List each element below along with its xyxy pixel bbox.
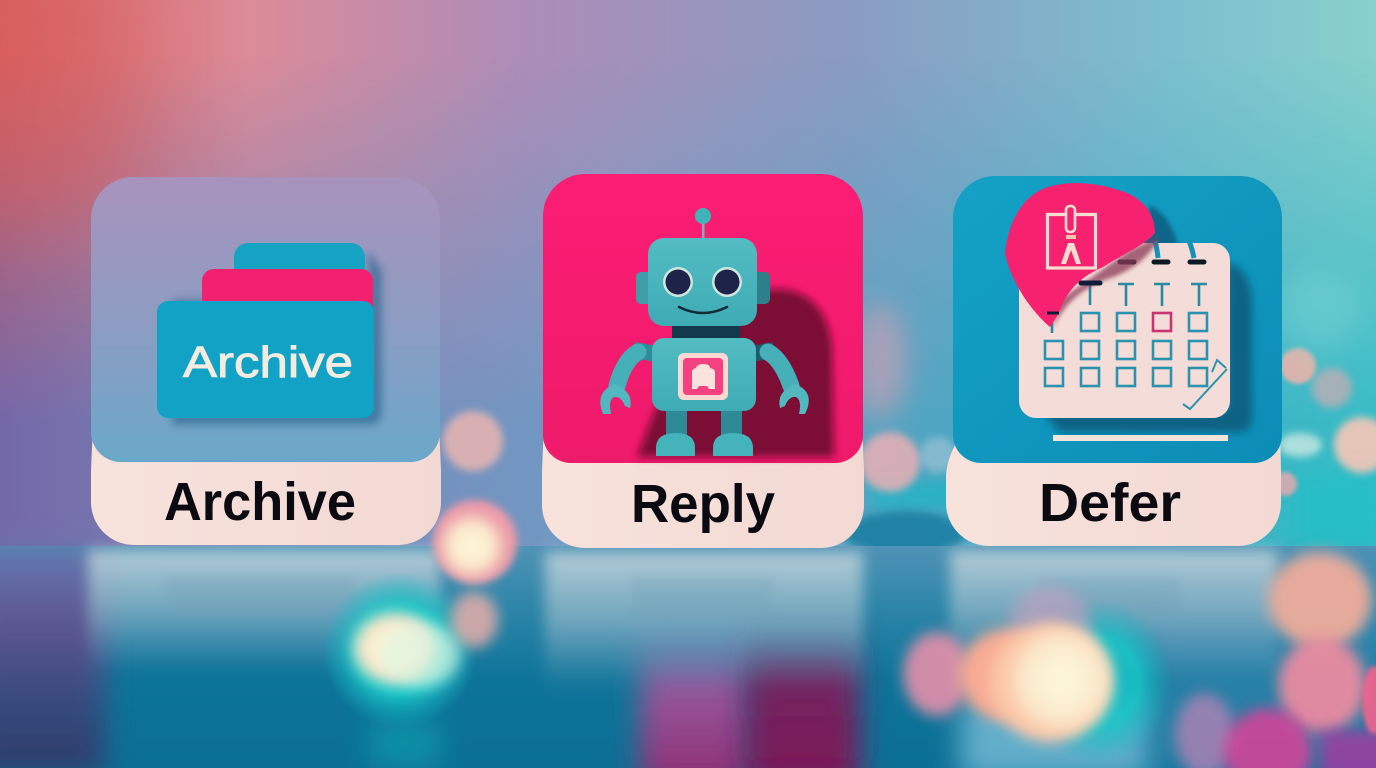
label: reply: Reply (631, 474, 775, 534)
tick caps (1081, 280, 1100, 286)
robot shadow (637, 289, 834, 457)
panel: defer (946, 176, 1282, 546)
card top: defer (953, 176, 1282, 463)
middle folder tab (202, 269, 373, 329)
card top: reply (543, 174, 863, 463)
pink peeled page (1005, 183, 1155, 327)
eyes (663, 267, 693, 297)
smile (679, 307, 727, 313)
calendar base line (1053, 435, 1228, 441)
icon: calendar (1005, 183, 1252, 441)
icon: folders (157, 243, 382, 425)
bokeh: pink and cream by archive card (433, 500, 517, 584)
antenna (702, 222, 704, 239)
peel shadow (1052, 236, 1160, 330)
panel: reply (542, 174, 864, 548)
calendar header ticks (1118, 284, 1207, 306)
pen mark (1183, 360, 1227, 409)
ears (636, 272, 654, 304)
label: archive: Archive (164, 472, 356, 532)
head (648, 238, 757, 326)
card top: archive (91, 177, 440, 462)
panel: archive (91, 177, 441, 545)
hands (600, 384, 631, 414)
bokeh lights (322, 270, 1376, 768)
calendar page (1019, 243, 1230, 418)
label plate: reply (542, 425, 864, 548)
feet (656, 433, 695, 456)
reflective floor (0, 546, 1376, 768)
calendar grid (1045, 313, 1207, 386)
label plate: archive (91, 425, 441, 545)
label: defer: Defer (1039, 473, 1181, 533)
body (652, 338, 756, 411)
bokeh: warm cluster on floor (1028, 600, 1172, 764)
folder label: Archive (183, 338, 353, 387)
icon: robot (600, 208, 809, 456)
calendar binding rings (1120, 260, 1204, 264)
bokeh: pink cluster right (1268, 552, 1372, 648)
label plate: defer (946, 425, 1281, 546)
page emblem (1048, 206, 1096, 268)
arms (634, 350, 656, 354)
back folder tab (234, 243, 365, 303)
front folder (157, 301, 374, 418)
legs (666, 410, 687, 436)
bokeh: cream and teal on floor (322, 572, 478, 728)
neck (672, 326, 740, 340)
background gradient (0, 0, 1376, 560)
chest badge (678, 353, 728, 400)
